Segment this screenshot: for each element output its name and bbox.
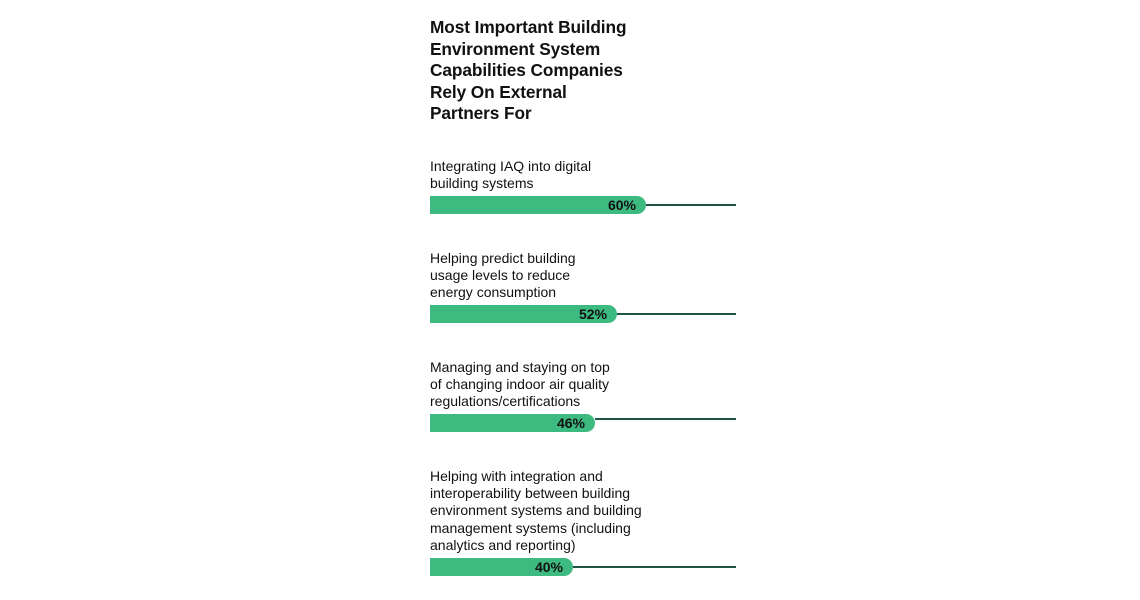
label: regulations: of changing indoor air quality <box>430 376 609 392</box>
title: Most Important Building <box>430 17 626 37</box>
title: Rely On External <box>430 82 567 102</box>
title <box>430 17 626 123</box>
bar: 40% <box>430 558 573 576</box>
label: integration: Helping with integration and <box>430 468 603 484</box>
label: regulations <box>430 359 610 409</box>
bar: 52%: 52% <box>579 306 607 322</box>
bar: 46%: 46% <box>557 415 585 431</box>
label: IAQ: Integrating IAQ into digital <box>430 158 591 174</box>
label: predict usage: energy consumption <box>430 284 556 300</box>
label: regulations: Managing and staying on top <box>430 359 610 375</box>
label: predict usage: Helping predict building <box>430 250 576 266</box>
bar: 60% <box>430 196 646 214</box>
bar: 52% <box>430 305 617 323</box>
bar: 60%: 60% <box>608 197 636 213</box>
label: integration <box>430 468 642 553</box>
title: Environment System <box>430 39 600 59</box>
label: predict usage <box>430 250 576 300</box>
label: integration: environment systems and building <box>430 502 642 518</box>
label: integration: management systems (including <box>430 520 631 536</box>
label: IAQ <box>430 158 591 191</box>
label: integration: analytics and reporting) <box>430 537 576 553</box>
bar: 40%: 40% <box>535 559 563 575</box>
label: predict usage: usage levels to reduce <box>430 267 570 283</box>
title: Partners For <box>430 103 532 123</box>
label: IAQ: building systems <box>430 175 534 191</box>
title: Capabilities Companies <box>430 60 623 80</box>
label: integration: interoperability between building <box>430 485 630 501</box>
bar: 46% <box>430 414 595 432</box>
label: regulations: regulations/certifications <box>430 393 580 409</box>
